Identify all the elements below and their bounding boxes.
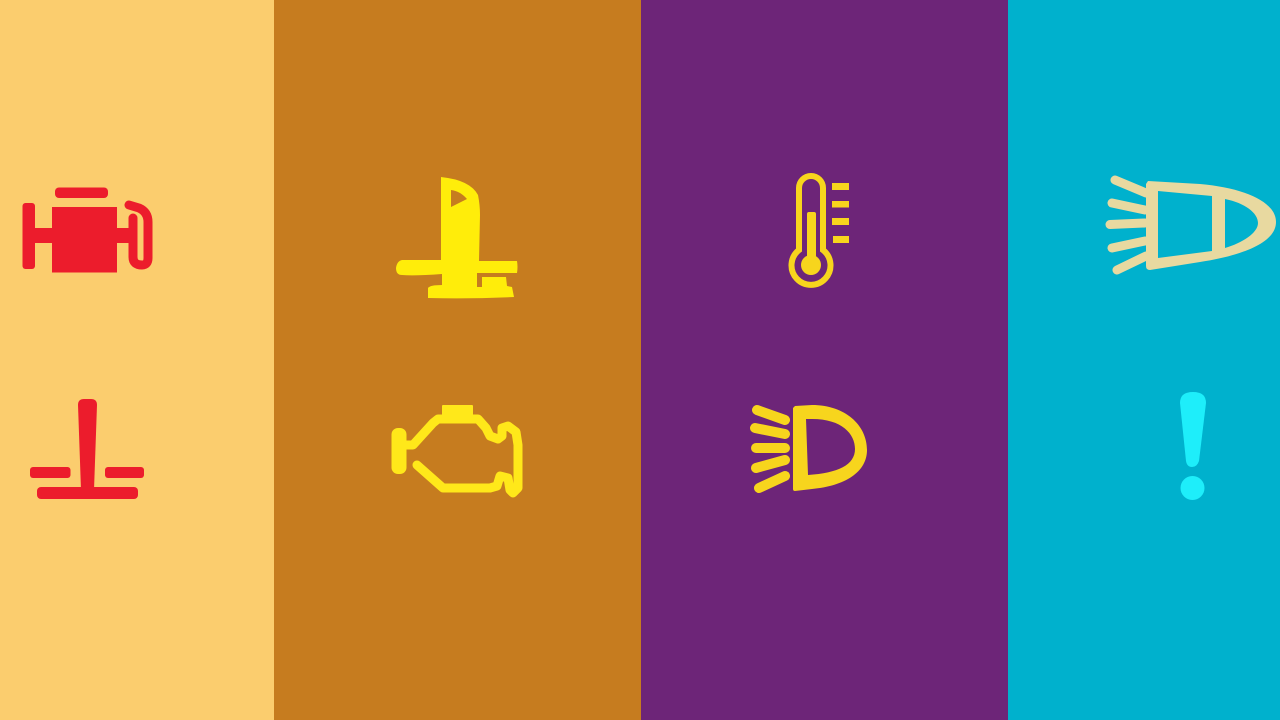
icon: thermometer	[791, 176, 849, 285]
panel: teal column	[1008, 0, 1280, 720]
panel: pale orange column	[0, 0, 274, 720]
panel: brown column	[274, 0, 641, 720]
icon: red oil level	[30, 399, 144, 499]
icon: yellow headlight	[755, 405, 867, 491]
panel: purple column	[641, 0, 1008, 720]
icon: yellow oil level with dipstick	[396, 177, 518, 298]
icon: red solid engine	[22, 188, 148, 272]
icon: yellow engine outline	[392, 405, 518, 493]
icon: beige headlight	[1110, 180, 1276, 270]
icon: cyan exclamation mark	[1180, 392, 1206, 500]
